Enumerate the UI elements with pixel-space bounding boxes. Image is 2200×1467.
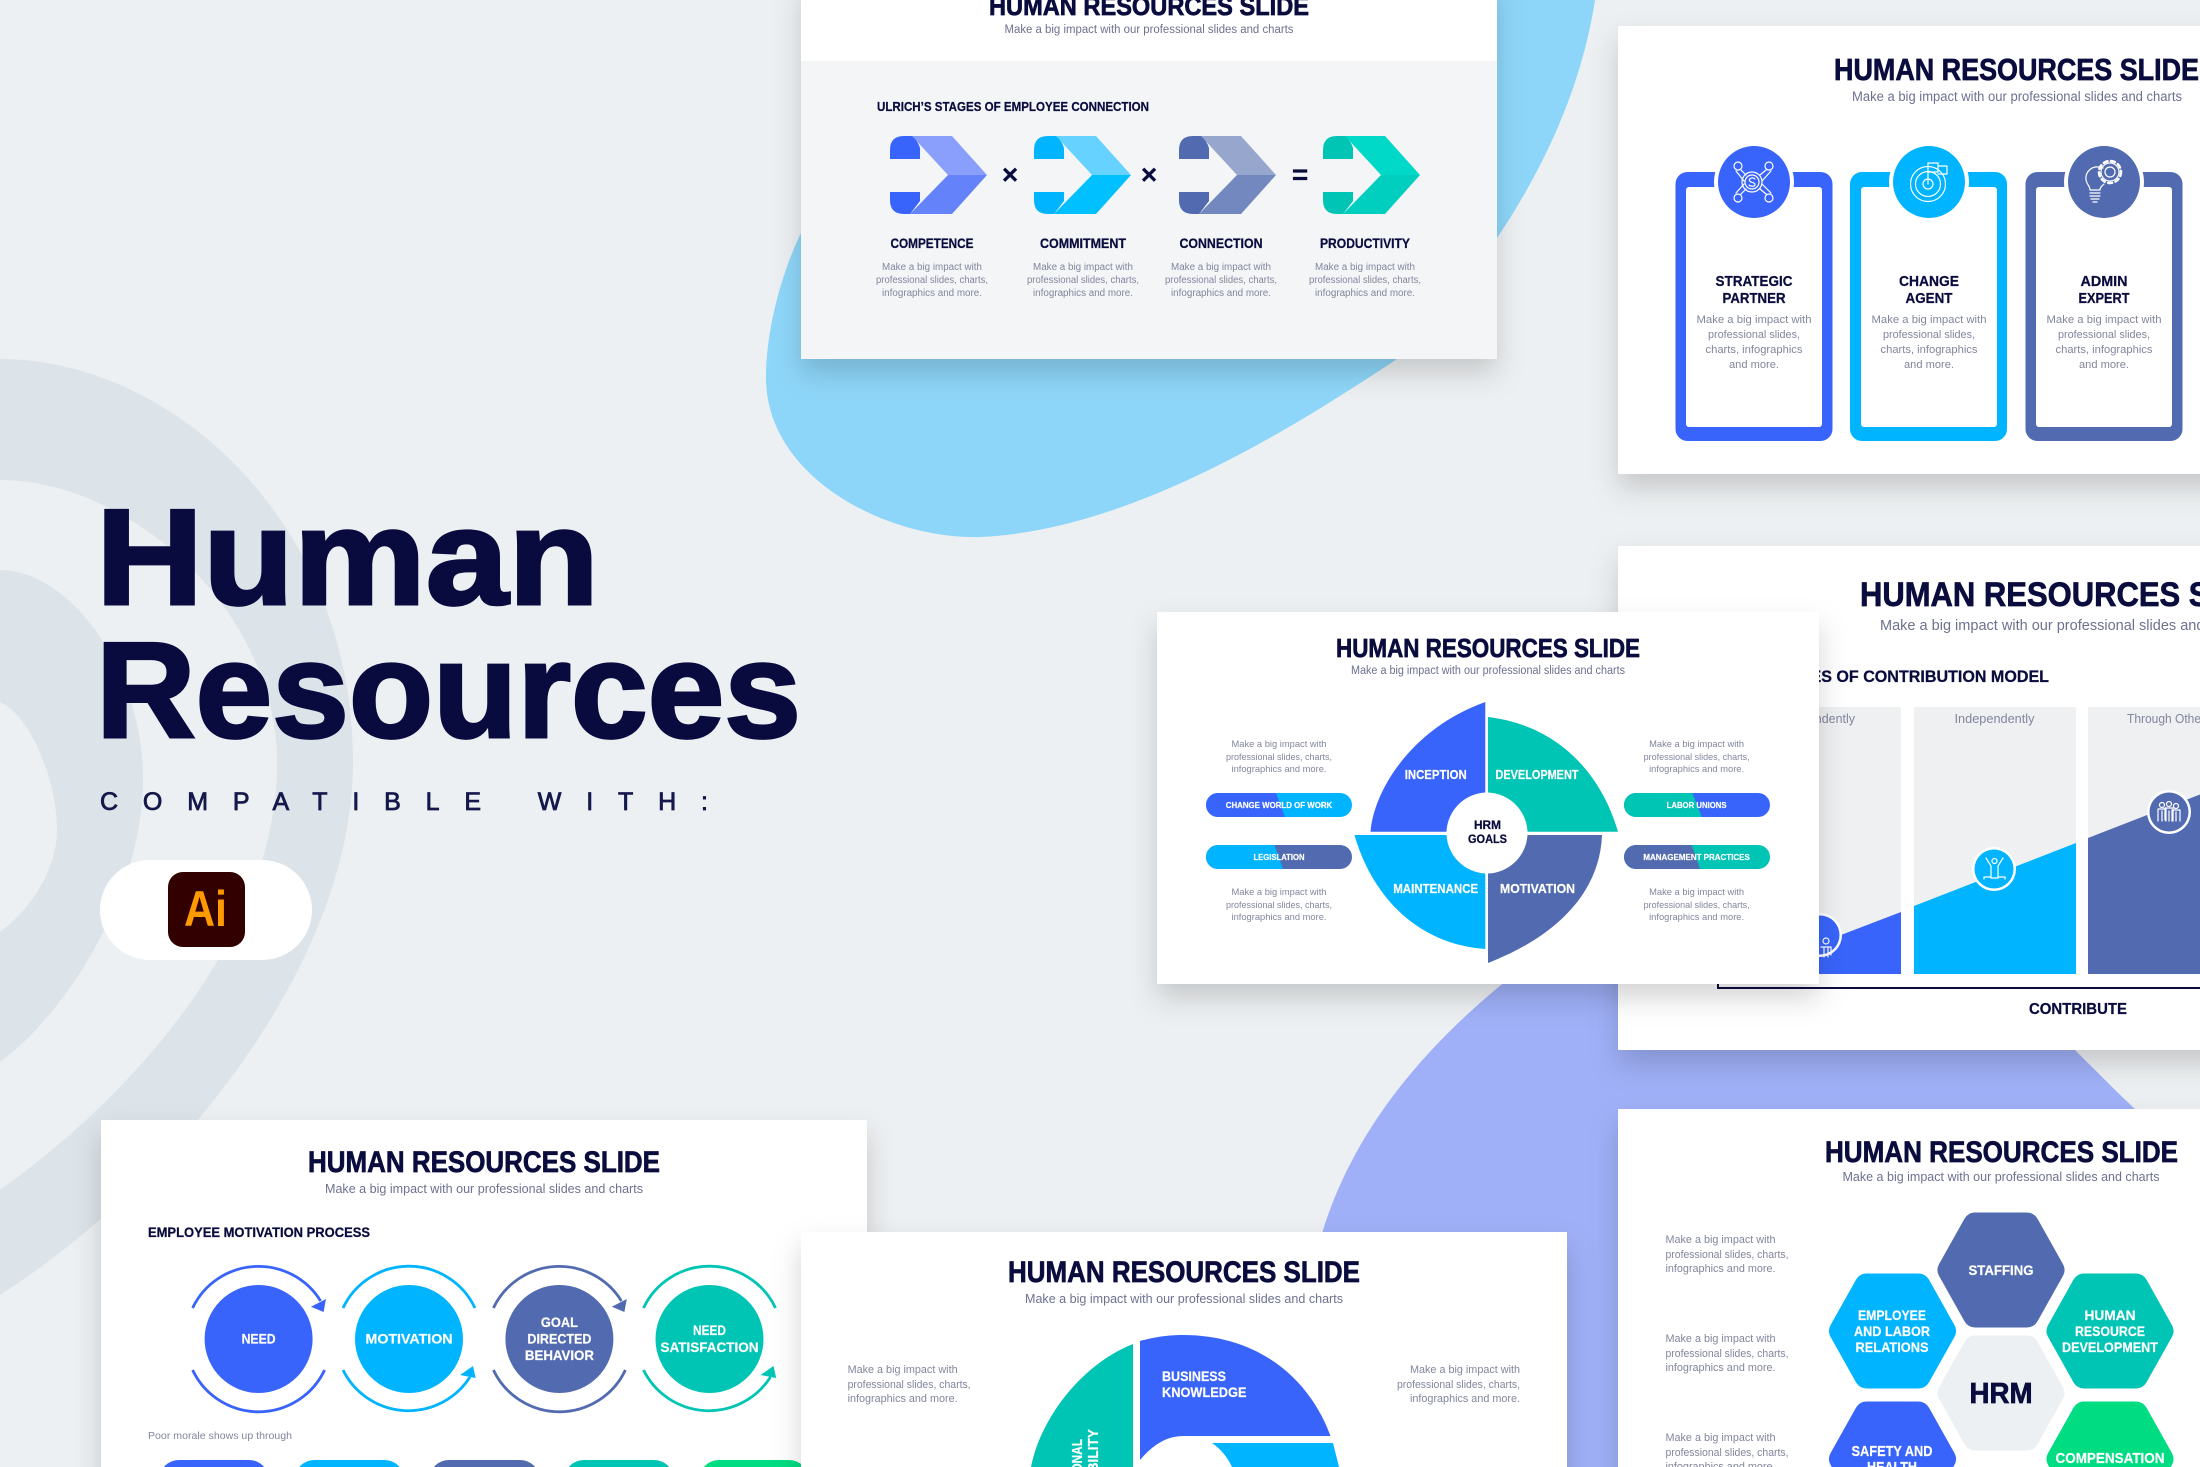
text block 2: [1666, 1333, 1788, 1374]
pill: legislation: LEGISLATION: [1254, 852, 1304, 862]
icon: person raising arms: [1984, 858, 2005, 879]
step: need: [193, 1266, 326, 1412]
text block 3: professional slides, charts,: [1666, 1447, 1788, 1459]
sector: business knowledge: [1140, 1335, 1330, 1460]
text block 1: Make a big impact with: [1666, 1234, 1776, 1246]
step: goal directed behavior: DIRECTED: [527, 1330, 591, 1346]
card: admin expert: professional slides,: [2058, 329, 2150, 341]
text block: upper right: Make a big impact with: [1649, 739, 1744, 750]
pill: management practices: [1624, 845, 1770, 869]
step: need: NEED: [242, 1330, 276, 1346]
pill: change world of work: CHANGE WORLD OF WORK: [1226, 800, 1333, 810]
text block 1: [1666, 1234, 1788, 1275]
column text: competence: [876, 236, 988, 299]
bottom pills row: [159, 1460, 809, 1467]
sector: inception: INCEPTION: [1405, 768, 1467, 782]
card: strategic partner: professional slides,: [1708, 329, 1800, 341]
hexagon: employee and labor relations: RELATIONS: [1856, 1339, 1928, 1355]
column text: connection: infographics and more.: [1171, 288, 1271, 299]
hexagon: employee and labor relations: EMPLOYEE: [1858, 1307, 1926, 1323]
card: change agent: AGENT: [1906, 290, 1952, 307]
card: change agent: CHANGE: [1899, 273, 1959, 290]
purple blob: [1315, 908, 2200, 1467]
text block 2: Make a big impact with: [1666, 1333, 1776, 1345]
panel: hexagon HRM slide: [1618, 1109, 2200, 1467]
step: goal directed behavior: GOAL: [541, 1314, 578, 1330]
column text: connection: [1165, 236, 1277, 299]
hexagon: staffing: [1950, 1224, 2052, 1316]
multiply sign: ×: [1002, 159, 1018, 190]
panel: business knowledge slide: [801, 1232, 1567, 1467]
hexagon: human resource development: DEVELOPMENT: [2062, 1339, 2158, 1355]
text block 3: Make a big impact with: [1666, 1432, 1776, 1444]
text block: upper right: professional slides, charts,: [1644, 752, 1750, 763]
column text: competence: professional slides, charts,: [876, 275, 988, 286]
hexagon: safety and health: [1841, 1414, 1944, 1467]
text block: left: [848, 1364, 971, 1405]
hexagon: HRM centre: HRM: [1970, 1378, 2032, 1410]
axis label: CONTRIBUTE: [2029, 1001, 2127, 1018]
column text: connection: professional slides, charts,: [1165, 275, 1277, 286]
text block: right: [1397, 1364, 1520, 1405]
slide subtitle: Make a big impact with our professional slides and charts: [1025, 1291, 1343, 1306]
column text: commitment: Make a big impact with: [1033, 262, 1133, 273]
card: strategic partner: PARTNER: [1722, 290, 1786, 307]
icon: Ai logo: Ai: [184, 881, 227, 937]
pill: labor unions: LABOR UNIONS: [1667, 800, 1727, 810]
card: change agent: professional slides,: [1883, 329, 1975, 341]
step: goal directed behavior: [493, 1266, 627, 1412]
text block: lower left: professional slides, charts,: [1226, 900, 1332, 911]
pill: change world of work: [1206, 793, 1352, 817]
icon: target with flags: [1910, 163, 1947, 202]
card: admin expert: ADMIN: [2080, 273, 2128, 290]
column text: commitment: infographics and more.: [1033, 288, 1133, 299]
text block 2: infographics and more.: [1666, 1362, 1776, 1374]
step: motivation: MOTIVATION: [366, 1330, 452, 1346]
slide subtitle: Make a big impact with our professional slides and charts: [325, 1181, 643, 1196]
icon: group of people: [2158, 802, 2180, 821]
icon: chevron productivity: [1323, 136, 1420, 214]
text block: left: infographics and more.: [848, 1393, 958, 1405]
text block: upper right: infographics and more.: [1649, 764, 1744, 775]
text block: left: Make a big impact with: [848, 1364, 958, 1376]
text block: lower right: [1644, 887, 1750, 923]
icon: chevron competence: [890, 136, 987, 214]
hexagon: safety and health: SAFETY AND: [1852, 1444, 1932, 1460]
slide title: HUMAN RESOURCES SLIDE: [308, 1146, 660, 1179]
main title: Resources: [96, 614, 801, 766]
sector: development: [1488, 717, 1618, 832]
text block: upper left: [1226, 739, 1332, 775]
compatible with label: COMPATIBLE WITH:: [100, 788, 708, 816]
column text: connection: CONNECTION: [1180, 236, 1262, 251]
column text: commitment: [1027, 236, 1139, 299]
text block: lower right: infographics and more.: [1649, 912, 1744, 923]
text block: right: infographics and more.: [1410, 1393, 1520, 1405]
sector: business knowledge: KNOWLEDGE: [1162, 1385, 1246, 1400]
main title: Human: [96, 481, 599, 633]
column: independently: [1914, 707, 2076, 974]
sector: motivation: MOTIVATION: [1500, 882, 1575, 896]
centre label: [1468, 820, 1507, 846]
slide title: HUMAN RESOURCES SLIDE: [1336, 633, 1640, 663]
text block: lower right: professional slides, charts,: [1644, 900, 1750, 911]
hexagon: human resource development: [2058, 1286, 2162, 1376]
card: strategic partner: and more.: [1729, 359, 1779, 371]
card: admin expert: and more.: [2079, 359, 2129, 371]
column text: productivity: professional slides, charts,: [1309, 275, 1421, 286]
pill: Adobe Illustrator badge: [100, 860, 312, 960]
icon: handshake coin: [1734, 162, 1773, 202]
column text: competence: COMPETENCE: [890, 236, 974, 251]
column text: productivity: PRODUCTIVITY: [1320, 236, 1410, 251]
text block: lower left: Make a big impact with: [1232, 887, 1326, 898]
card: change agent: [1850, 142, 2007, 441]
pill: legislation: [1206, 845, 1352, 869]
slide subtitle: Make a big impact with our professional slides and charts: [1351, 665, 1625, 677]
slide title: HUMAN RESOURCES SLIDE: [1008, 1256, 1360, 1289]
icon: bulb and gear: [2086, 161, 2121, 202]
hexagon: staffing: STAFFING: [1968, 1262, 2034, 1278]
centre label: HRM: [1474, 820, 1501, 832]
background concentric rings: [0, 359, 353, 1295]
sector: maintenance: MAINTENANCE: [1393, 882, 1478, 896]
sector: business knowledge: BUSINESS: [1162, 1369, 1226, 1384]
slide subtitle: Make a big impact with our professional slides and charts: [1842, 1169, 2160, 1184]
card: admin expert: [2026, 142, 2182, 441]
hexagon: HRM centre: [1950, 1348, 2052, 1438]
column text: competence: Make a big impact with: [882, 262, 982, 273]
icon: chevron commitment: [1034, 136, 1131, 214]
step: need satisfaction: NEED: [693, 1322, 726, 1338]
sector: development: DEVELOPMENT: [1496, 768, 1579, 782]
sector: personal credibility: [1031, 1344, 1133, 1467]
hexagon: compensation: COMPENSATION: [2056, 1451, 2164, 1467]
card: strategic partner: Make a big impact with: [1696, 314, 1812, 326]
card: change agent: and more.: [1904, 359, 1954, 371]
column text: commitment: professional slides, charts,: [1027, 275, 1139, 286]
panel: motivation process slide: [101, 1120, 867, 1467]
text block: upper right: [1644, 739, 1750, 775]
sector: inception: [1370, 702, 1485, 832]
text block: upper left: infographics and more.: [1232, 764, 1326, 775]
slide subtitle: Make a big impact with our professional slides and charts: [1852, 89, 2182, 104]
text block: upper left: professional slides, charts,: [1226, 752, 1332, 763]
equals sign: =: [1292, 159, 1308, 190]
section heading: ULRICH’S STAGES OF EMPLOYEE CONNECTION: [877, 99, 1149, 114]
caption: Poor morale shows up through: [148, 1430, 292, 1442]
step: need satisfaction: SATISFACTION: [660, 1339, 758, 1355]
step: need satisfaction: [644, 1266, 776, 1411]
step: motivation: [343, 1266, 476, 1411]
text block: lower left: infographics and more.: [1232, 912, 1326, 923]
pill: labor unions: [1624, 793, 1770, 817]
section heading: EMPLOYEE MOTIVATION PROCESS: [148, 1225, 370, 1240]
card: change agent: Make a big impact with: [1872, 314, 1986, 326]
panel: HRM goals slide: [1157, 612, 1819, 984]
icon: chevron connection: [1179, 136, 1276, 214]
column: dependently: [1739, 707, 1901, 974]
text block 2: professional slides, charts,: [1666, 1348, 1788, 1360]
hexagon: human resource development: RESOURCE: [2075, 1323, 2145, 1339]
hexagon: compensation: [2056, 1414, 2164, 1467]
text block: lower left: [1226, 887, 1332, 923]
text block: left: professional slides, charts,: [848, 1379, 971, 1391]
panel: contribution model slide: [1618, 546, 2200, 1050]
card: admin expert: Make a big impact with: [2046, 314, 2162, 326]
hexagon: human resource development: HUMAN: [2084, 1307, 2136, 1323]
centre label: GOALS: [1468, 834, 1507, 846]
section heading: STAGES OF CONTRIBUTION MODEL: [1767, 668, 2049, 686]
text block 1: professional slides, charts,: [1666, 1249, 1788, 1261]
step: goal directed behavior: BEHAVIOR: [525, 1347, 594, 1363]
pill: management practices: MANAGEMENT PRACTICES: [1643, 852, 1750, 862]
text block 1: infographics and more.: [1666, 1263, 1776, 1275]
icon: Ai logo: [168, 872, 245, 947]
slide subtitle: Make a big impact with our professional slides and charts: [1004, 24, 1294, 36]
column text: productivity: [1309, 236, 1421, 299]
main title: [96, 481, 801, 766]
column: independently: Independently: [1954, 711, 2035, 726]
column text: competence: infographics and more.: [882, 288, 982, 299]
hexagon: employee and labor relations: AND LABOR: [1854, 1323, 1930, 1339]
card: strategic partner: charts, infographics: [1706, 344, 1803, 356]
hexagon: employee and labor relations: [1841, 1286, 1944, 1376]
multiply sign: ×: [1141, 159, 1157, 190]
axis line: [1718, 984, 2200, 988]
text block: upper left: Make a big impact with: [1232, 739, 1326, 750]
card: admin expert: charts, infographics: [2056, 344, 2153, 356]
text block 3: [1666, 1432, 1788, 1467]
column: through others: [2088, 707, 2200, 974]
card: strategic partner: STRATEGIC: [1716, 273, 1793, 290]
text block: lower right: Make a big impact with: [1649, 887, 1744, 898]
panel: Ulrich stages slide: [801, 0, 1497, 359]
panel: three roles slide: [1618, 26, 2200, 474]
sector: light blue: [1212, 1443, 1339, 1467]
card: strategic partner: [1676, 142, 1832, 441]
card: admin expert: EXPERT: [2078, 290, 2130, 307]
column text: commitment: COMMITMENT: [1040, 236, 1127, 251]
column text: productivity: Make a big impact with: [1315, 262, 1415, 273]
text block: right: professional slides, charts,: [1397, 1379, 1520, 1391]
sector: motivation: [1488, 835, 1602, 963]
sector: maintenance: [1354, 835, 1485, 949]
card: change agent: charts, infographics: [1880, 344, 1978, 356]
light blue blob: [766, 0, 1595, 537]
column: dependently: Dependently: [1785, 711, 1855, 726]
text block: right: Make a big impact with: [1410, 1364, 1520, 1376]
column text: connection: Make a big impact with: [1171, 262, 1271, 273]
column text: productivity: infographics and more.: [1315, 288, 1415, 299]
